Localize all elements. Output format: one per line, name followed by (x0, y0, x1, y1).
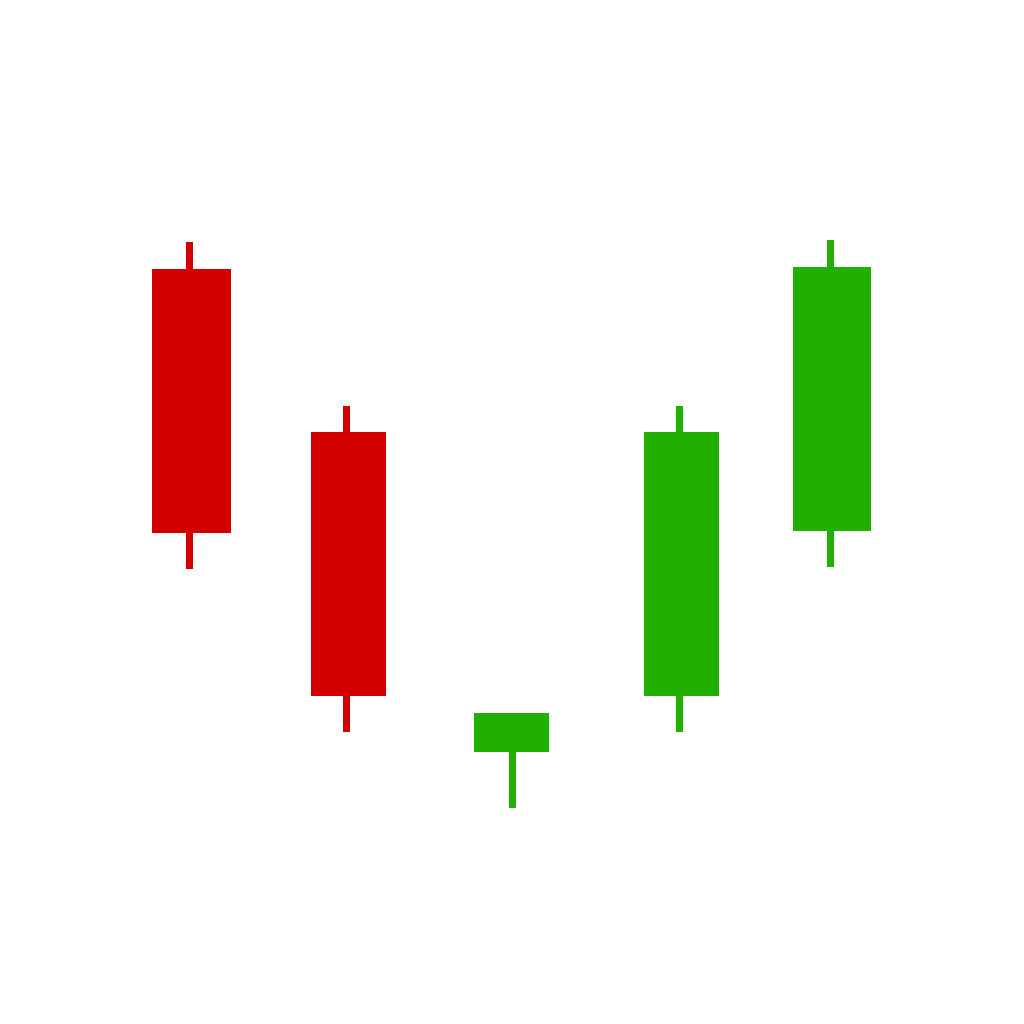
candle 3: green hammer bottom (474, 713, 549, 808)
candle 4: green bullish (644, 406, 719, 732)
candle 2: red bearish (311, 406, 386, 732)
candle 5: green bullish (793, 240, 871, 567)
candle 1: red bearish (152, 242, 231, 569)
